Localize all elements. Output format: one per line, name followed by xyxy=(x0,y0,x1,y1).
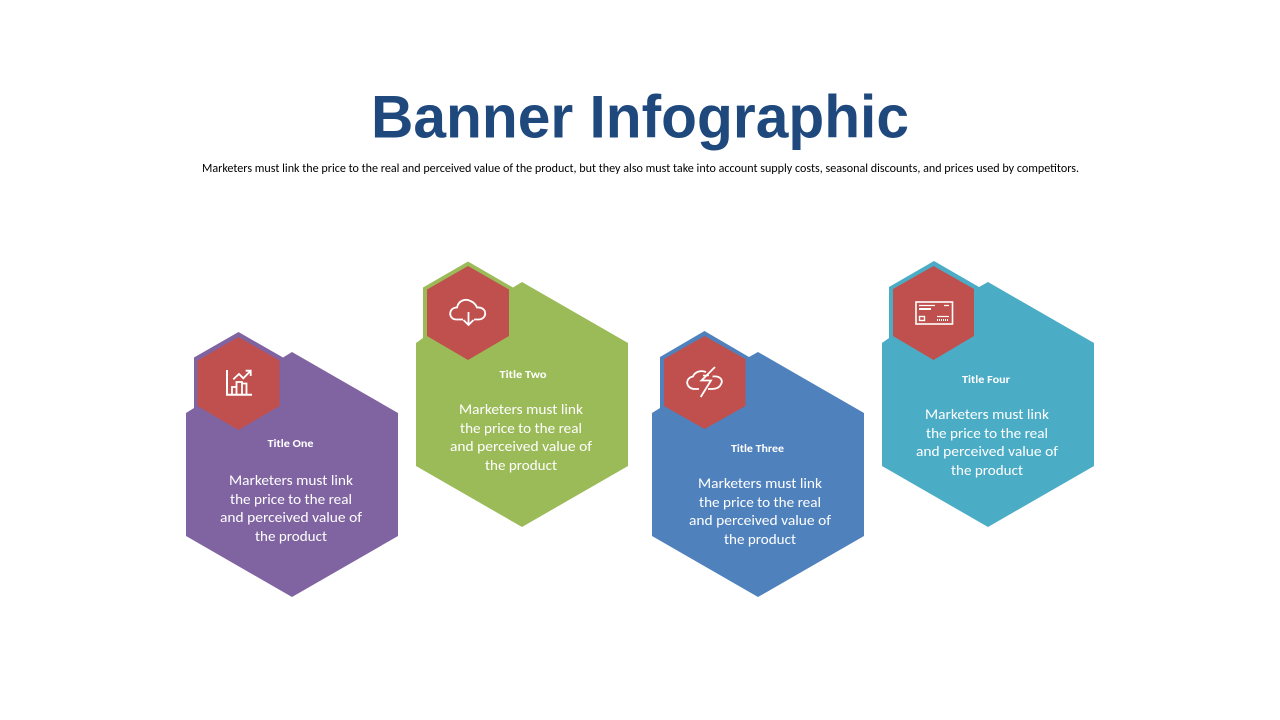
text block: the product xyxy=(951,462,1023,479)
subtitle: Marketers must link the price to the real and perceived value of the product, but they also must take into account supply costs, seasonal discounts, and prices used by competitors. xyxy=(202,162,1079,176)
red hexagon badge xyxy=(427,266,509,360)
text block: the price to the real xyxy=(699,494,821,511)
panel: title three xyxy=(652,331,864,597)
red hexagon badge xyxy=(893,266,974,360)
panel: title four xyxy=(882,261,1094,527)
text block: and perceived value of xyxy=(450,438,593,455)
heading: title four: Title Four xyxy=(962,373,1010,387)
text block: and perceived value of xyxy=(689,512,832,529)
green banner shape xyxy=(416,262,628,527)
text block: and perceived value of xyxy=(220,509,363,526)
purple banner shape xyxy=(186,332,398,597)
text block: the price to the real xyxy=(926,425,1048,442)
red hexagon badge xyxy=(664,336,746,429)
text block: Marketers must link xyxy=(229,472,354,489)
icon: growth chart xyxy=(227,370,252,395)
text block xyxy=(689,475,832,548)
red hexagon badge xyxy=(198,337,280,430)
text block: and perceived value of xyxy=(916,443,1059,460)
heading: title three: Title Three xyxy=(731,442,784,456)
text block: the product xyxy=(485,457,557,474)
icon: storm cloud xyxy=(687,367,722,397)
text block: the price to the real xyxy=(460,420,582,437)
title: Banner Infographic xyxy=(371,84,909,150)
heading: title one: Title One xyxy=(268,437,314,451)
text block: the product xyxy=(255,528,327,545)
teal banner shape xyxy=(882,261,1094,527)
text block: Marketers must link xyxy=(459,401,584,418)
text block xyxy=(450,401,593,474)
text block xyxy=(220,472,363,545)
heading: title two: Title Two xyxy=(500,368,546,382)
text block: Marketers must link xyxy=(698,475,823,492)
blue banner shape xyxy=(652,331,864,597)
icon: payment card xyxy=(916,302,952,324)
text block: Marketers must link xyxy=(925,406,1050,423)
text block xyxy=(916,406,1059,479)
icon: cloud download xyxy=(450,300,485,325)
panel: title two xyxy=(416,262,628,527)
panel: title one xyxy=(186,332,398,597)
text block: the product xyxy=(724,531,796,548)
text block: the price to the real xyxy=(230,491,352,508)
